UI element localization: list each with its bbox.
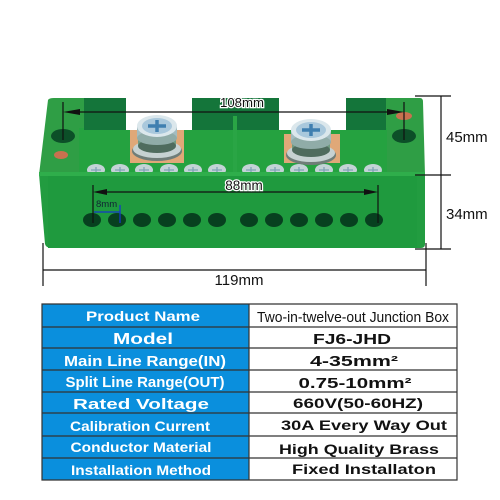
main screw left [132, 115, 182, 161]
specification table [42, 304, 457, 480]
table values [257, 309, 449, 477]
table value column [249, 304, 457, 480]
table values: 30A Every Way Out [281, 418, 448, 433]
table values: Fixed Installaton [292, 462, 436, 477]
dimension: 8mm: 8mm [96, 199, 117, 210]
table values: 660V(50-60HZ) [293, 395, 423, 411]
table values: FJ6-JHD [313, 332, 391, 348]
recessed terminal channel [79, 98, 387, 172]
table labels: Product Name [86, 308, 200, 324]
front face [39, 174, 425, 248]
table label column [42, 304, 249, 480]
dimension: 8mm [94, 199, 120, 223]
dimension: 88mm: 88mm [225, 178, 263, 193]
dimension: 108mm: 108mm [220, 95, 264, 110]
table values: Two-in-twelve-out Junction Box [257, 309, 449, 326]
table labels: Model [113, 331, 173, 348]
wire holes [83, 213, 383, 227]
dimension: 119mm: 119mm [215, 272, 263, 289]
small screws [87, 164, 382, 176]
table labels: Conductor Material [70, 439, 212, 455]
dimension: 45mm and 34mm: 45mm [446, 129, 488, 146]
table labels: Installation Method [71, 462, 211, 478]
dimension: 45mm and 34mm [415, 96, 488, 249]
copper plates [130, 130, 340, 163]
table labels: Rated Voltage [73, 396, 209, 413]
table labels [64, 308, 226, 478]
table values: 4-35mm² [310, 354, 398, 370]
table values: High Quality Brass [279, 442, 439, 457]
dimension: 88mm [93, 178, 378, 223]
copper dots [54, 112, 412, 159]
dimension: 45mm and 34mm: 34mm [446, 206, 488, 223]
dimension: 119mm [43, 243, 426, 289]
table labels: Split Line Range(OUT) [66, 374, 224, 391]
main screw right [286, 119, 336, 165]
table labels: Main Line Range(IN) [64, 353, 226, 370]
dimension: 108mm [63, 95, 404, 140]
box top surface [39, 98, 425, 175]
table labels: Calibration Current [70, 418, 210, 434]
table values: 0.75-10mm² [298, 376, 412, 392]
product: green junction box [39, 98, 425, 248]
mounting holes [51, 129, 416, 143]
